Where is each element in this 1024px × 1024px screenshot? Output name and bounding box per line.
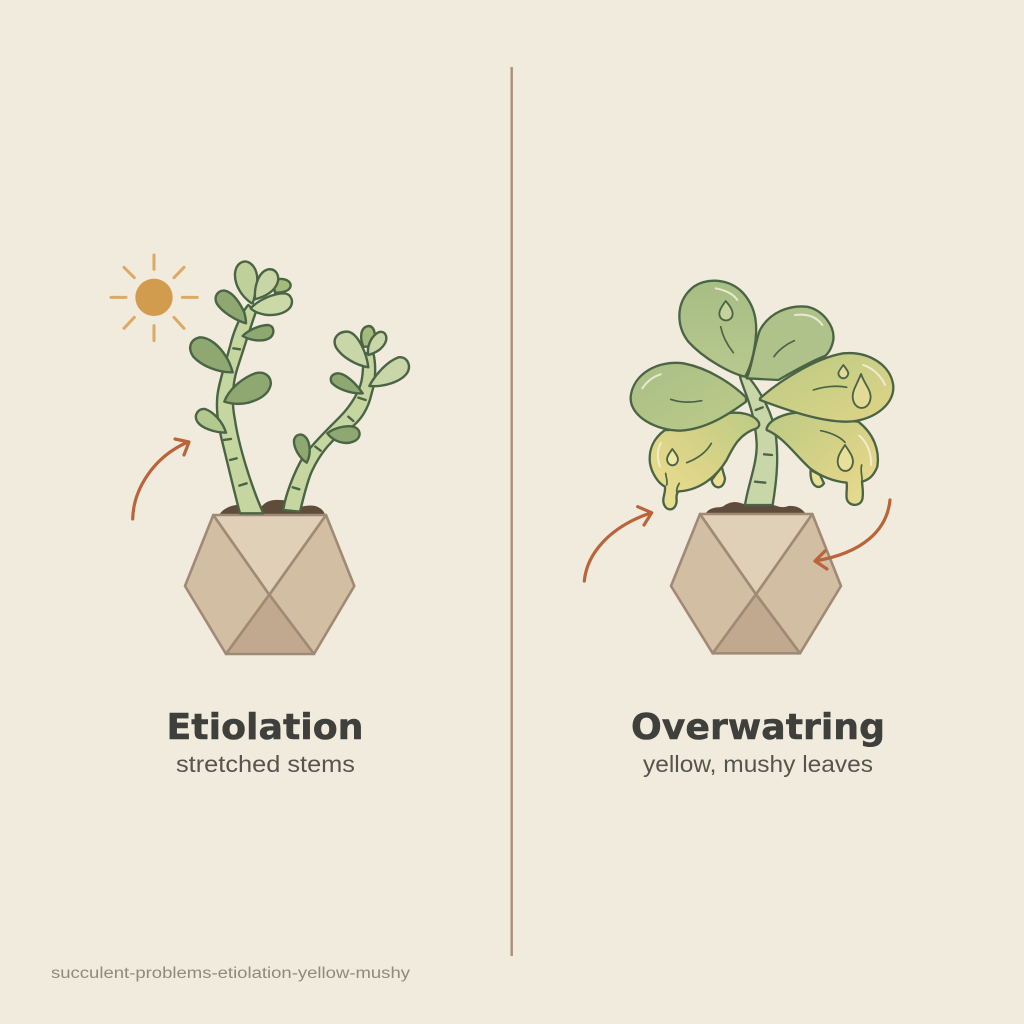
heading: etiolation: Etiolation bbox=[166, 707, 364, 748]
drips behind lower leaves bbox=[712, 467, 824, 487]
icon: sun bbox=[111, 255, 197, 341]
arrow: pointing at pot from right bbox=[815, 500, 890, 569]
soil: etiolation bbox=[219, 500, 325, 515]
leaves: left stem bbox=[190, 262, 292, 433]
plant: overwatered succulent bbox=[631, 281, 893, 509]
leaf: upper bbox=[679, 281, 756, 377]
pot: overwatering bbox=[671, 514, 841, 653]
center divider bbox=[510, 67, 513, 956]
stem bbox=[740, 375, 777, 505]
arrow: pointing at stretched stem bbox=[133, 439, 189, 519]
leaf veins bbox=[666, 327, 862, 492]
caption: file slug: succulent-problems-etiolation-yellow-mushy bbox=[51, 965, 410, 982]
panel: overwatering bbox=[584, 281, 893, 777]
leaf: right bbox=[760, 353, 893, 422]
pot: etiolation bbox=[185, 515, 354, 654]
stem: right branching stem bbox=[283, 353, 375, 512]
leaf: upper right bbox=[747, 306, 833, 380]
plant: stretched succulent bbox=[190, 262, 409, 513]
leaf highlights bbox=[642, 288, 885, 467]
arrow: pointing at lower left leaf bbox=[584, 507, 652, 581]
soil: overwatering bbox=[705, 502, 806, 514]
heading: overwatring: Overwatring bbox=[631, 707, 885, 748]
stem: left tall stem bbox=[217, 305, 263, 513]
stem segment marks bbox=[224, 348, 366, 489]
water drops bbox=[667, 301, 871, 471]
leaves: right stem bbox=[294, 326, 409, 463]
subheading: etiolation: stretched stems bbox=[176, 751, 355, 777]
panel: etiolation bbox=[111, 255, 409, 777]
subheading: overwatring: yellow, mushy leaves bbox=[643, 751, 873, 777]
leaf: lower right bbox=[767, 413, 878, 505]
leaf: lower left bbox=[650, 413, 759, 509]
leaf: left bbox=[631, 363, 746, 431]
